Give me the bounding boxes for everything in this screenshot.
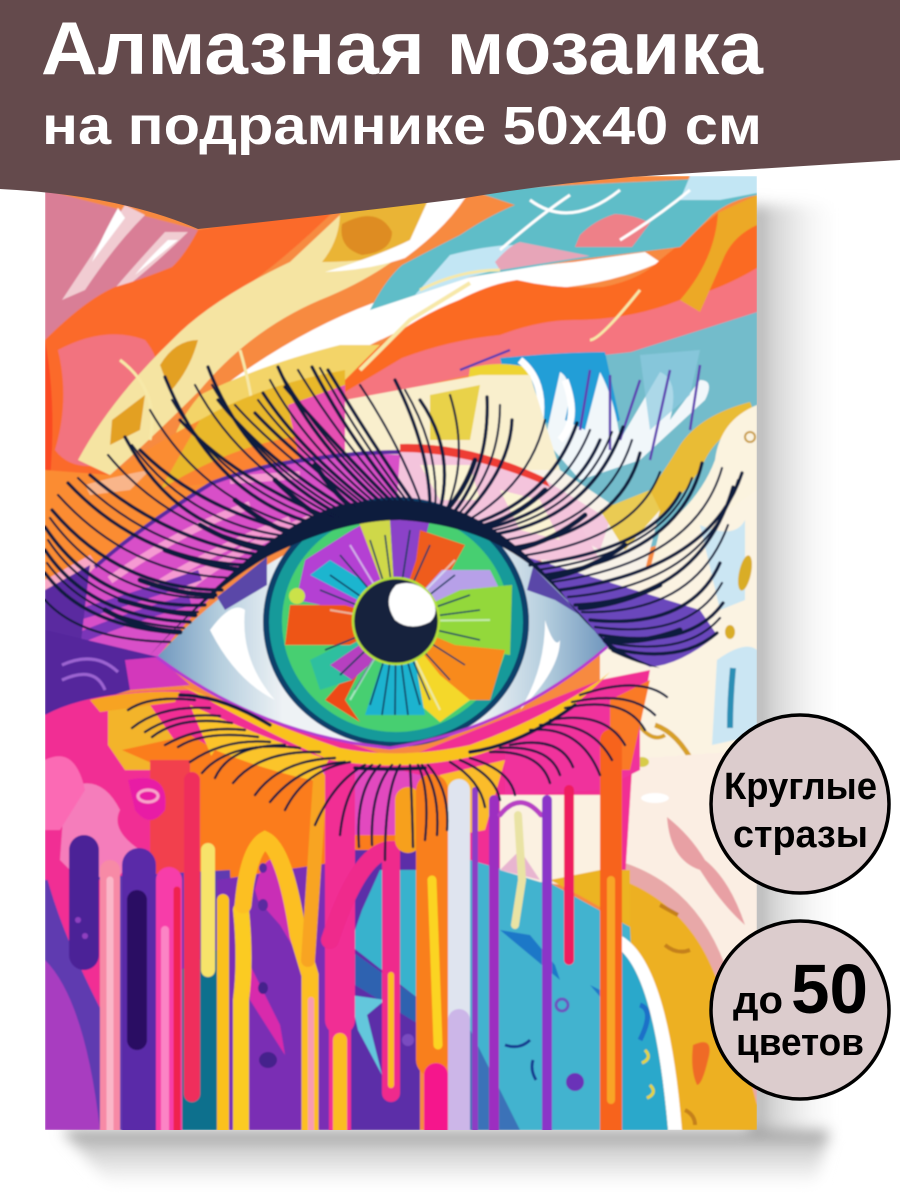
lower background colours	[45, 795, 682, 1130]
badge: round rhinestones: Круглые	[724, 766, 877, 808]
sclera	[158, 546, 607, 744]
top swirls	[45, 176, 757, 476]
badge: round rhinestones: стразы	[733, 814, 868, 856]
lower pink and orange field	[45, 670, 650, 900]
top banner	[0, 0, 900, 229]
purple eye corners	[217, 557, 583, 617]
upper right swirls	[460, 312, 757, 610]
lower lid edge	[157, 647, 607, 748]
lash line	[150, 500, 660, 668]
drips	[84, 740, 611, 1150]
badge: up to 50 colours: до	[733, 980, 783, 1022]
pupil highlight	[389, 583, 436, 627]
right lid purple mass	[520, 555, 717, 667]
badge: up to 50 colours: 50	[791, 950, 868, 1028]
painting base	[45, 176, 757, 1130]
subtitle: на подрамнике 50x40 см	[42, 96, 762, 156]
right side cream	[600, 490, 757, 1130]
pupil	[353, 578, 439, 664]
title: Алмазная мозаика	[41, 6, 764, 90]
sclera white strokes	[210, 608, 560, 710]
upper lashes	[45, 367, 742, 654]
painting: rainbow eye	[45, 176, 757, 1150]
canvas shadow	[62, 205, 835, 1185]
badge: up to 50 colours	[711, 921, 889, 1099]
iris	[263, 497, 529, 747]
yellow lower lid line	[183, 672, 610, 765]
lower lashes	[128, 685, 667, 860]
left flames and crease	[45, 370, 600, 715]
bottom paint dots	[75, 863, 414, 1068]
badge: up to 50 colours: цветов	[736, 1022, 864, 1064]
badge: round rhinestones	[711, 715, 889, 893]
